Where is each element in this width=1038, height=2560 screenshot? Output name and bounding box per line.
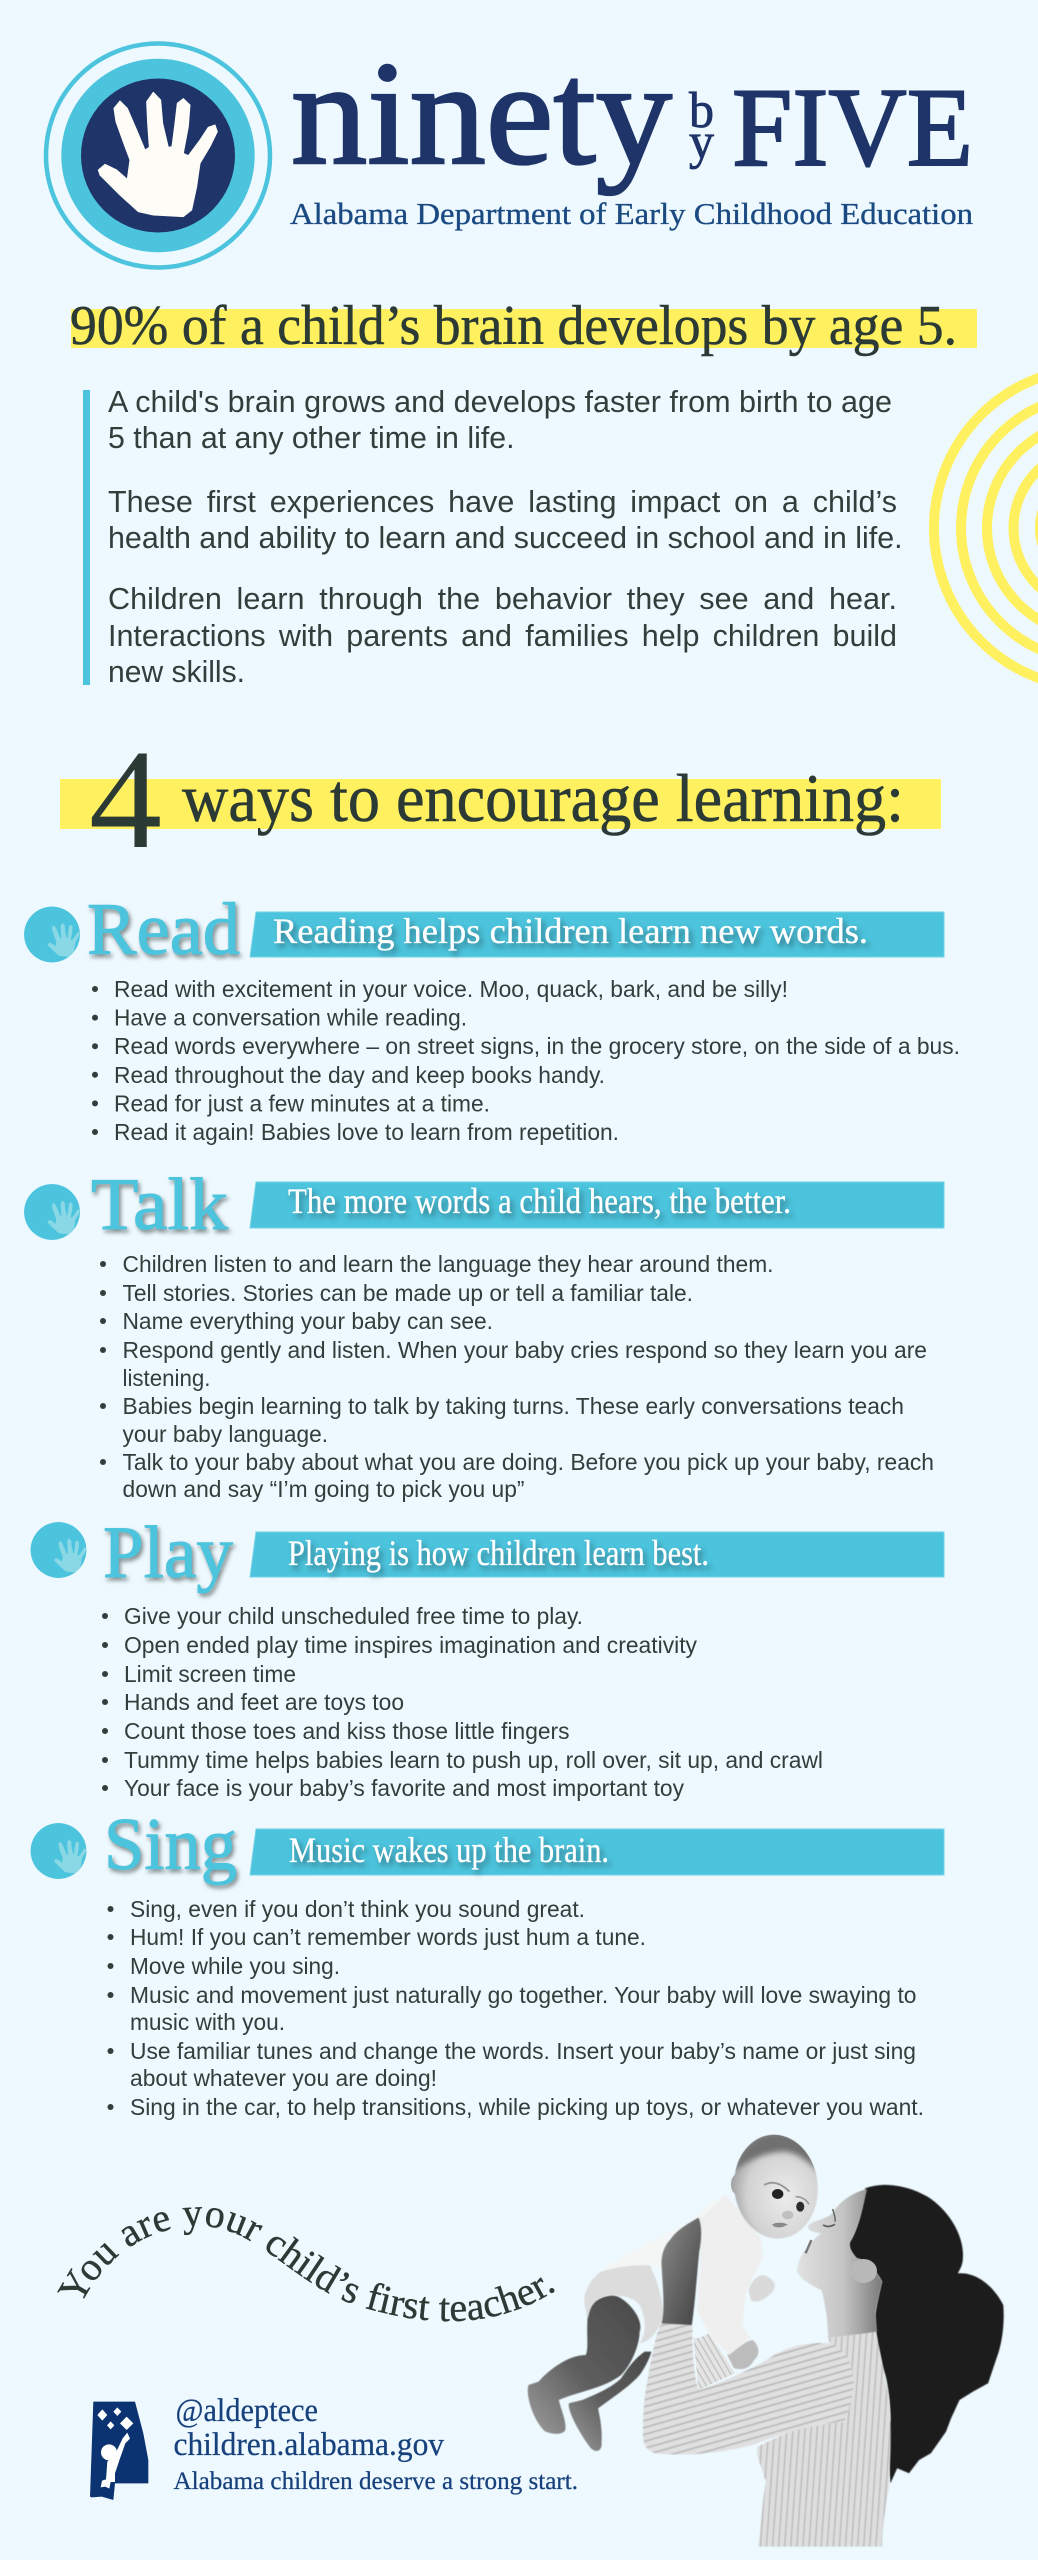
- wordmark: by: y: [689, 114, 714, 170]
- wordmark: by: [689, 83, 714, 170]
- baby's hand right: [748, 2275, 775, 2302]
- text block: intro paragraphs with blue rule: Children learn through the behavior they see and hear.: [108, 582, 897, 616]
- icon: yellow concentric rings: [934, 368, 1038, 688]
- heading: 4 ways to encourage learning: [60, 720, 941, 878]
- text block: intro paragraphs with blue rule: These first experiences have lasting impact on a child’s: [108, 485, 897, 519]
- list: play tips: Hands and feet are toys too: [124, 1689, 404, 1715]
- icon: read hand circle: [24, 906, 80, 962]
- list: sing tips: [108, 1896, 924, 2120]
- list: play tips: Limit screen time: [124, 1661, 296, 1687]
- icon: Alabama state with child reaching for stars: [90, 2402, 148, 2500]
- list: read tips: Read with excitement in your voice. Moo, quack, bark, and be silly!: [114, 976, 788, 1002]
- baby's bodysuit arm: [697, 2194, 763, 2355]
- list: talk tips: listening.: [122, 1365, 210, 1391]
- baby's diaper: [584, 2265, 663, 2343]
- text block: intro paragraphs with blue rule: A child's brain grows and develops faster from birth to age: [108, 385, 892, 419]
- list: sing tips: Move while you sing.: [130, 1953, 340, 1979]
- baby's hand lower: [727, 2340, 758, 2369]
- icon: sing hand circle: [30, 1823, 86, 1879]
- list: read tips: [92, 976, 960, 1145]
- baby's hair: [736, 2134, 816, 2174]
- list: play tips: Open ended play time inspires imagination and creativity: [124, 1632, 697, 1658]
- list: sing tips: Hum! If you can’t remember words just hum a tune.: [130, 1924, 646, 1950]
- mother's face and neck: [797, 2189, 882, 2338]
- baby's head: [729, 2131, 823, 2243]
- headline: 90% statement on yellow bar: 90% of a child’s brain develops by age 5.: [70, 295, 957, 357]
- list: play tips: Count those toes and kiss those little fingers: [124, 1718, 570, 1744]
- list: talk tips: Name everything your baby can see.: [122, 1308, 493, 1334]
- list: play tips: Your face is your baby’s favorite and most important toy: [124, 1775, 684, 1801]
- list: sing tips: music with you.: [130, 2009, 285, 2035]
- mother's ear: [850, 2259, 877, 2283]
- panel: Talk: [24, 1164, 944, 1502]
- list: play tips: [102, 1603, 823, 1801]
- list: sing tips: Use familiar tunes and change the words. Insert your baby’s name or just sing: [130, 2038, 916, 2064]
- heading: Sing: Sing: [104, 1804, 237, 1886]
- wordmark: FIVE: FIVE: [732, 66, 973, 190]
- list: talk tips: Respond gently and listen. When your baby cries respond so they learn you are: [122, 1337, 927, 1363]
- text: social handle: @aldeptece: [176, 2393, 318, 2429]
- list: read tips: Read throughout the day and keep books handy.: [114, 1062, 605, 1088]
- icon: talk hand circle: [24, 1184, 80, 1240]
- text block: intro paragraphs with blue rule: 5 than at any other time in life.: [108, 421, 515, 455]
- list: talk tips: down and say “I’m going to pick you up”: [122, 1476, 524, 1502]
- banner: talk: The more words a child hears, the better.: [288, 1181, 791, 1221]
- heading: 4 ways to encourage learning: 4: [89, 720, 162, 878]
- list: talk tips: [100, 1251, 934, 1502]
- mother's hair: [849, 2185, 1004, 2483]
- list: talk tips: Talk to your baby about what you are doing. Before you pick up your baby, reach: [122, 1449, 934, 1475]
- illustration: mother lifting baby: [528, 2131, 1004, 2547]
- banner: sing: [250, 1829, 944, 1875]
- text: website: children.alabama.gov: [174, 2427, 444, 2463]
- heading: Play: Play: [103, 1512, 233, 1594]
- text block: intro paragraphs with blue rule: [83, 385, 903, 689]
- list: talk tips: Babies begin learning to talk by taking turns. These early conversations teach: [122, 1393, 904, 1419]
- baby's bodysuit back: [599, 2194, 725, 2272]
- baby's near leg: [528, 2295, 640, 2434]
- heading: Read: Read: [87, 889, 240, 971]
- mother's far forearm: [694, 2333, 735, 2390]
- panel: Read: [24, 889, 960, 1145]
- list: talk tips: Tell stories. Stories can be made up or tell a familiar tale.: [122, 1280, 693, 1306]
- banner: play: Playing is how children learn best.: [288, 1533, 709, 1573]
- panel: Sing: [30, 1804, 944, 2120]
- text block: intro paragraphs with blue rule: health and ability to learn and succeed in school and in life.: [108, 521, 903, 555]
- list: read tips: Read words everywhere – on street signs, in the grocery store, on the side of a bus.: [114, 1033, 960, 1059]
- list: read tips: Read for just a few minutes at a time.: [114, 1090, 490, 1116]
- text block: intro paragraphs with blue rule: Interactions with parents and families help children build: [108, 619, 897, 653]
- mother's hand: [661, 2218, 701, 2325]
- banner: reading: Reading helps children learn new words.: [273, 911, 868, 951]
- mother's facial features: [806, 2209, 835, 2253]
- list: sing tips: Sing in the car, to help transitions, while picking up toys, or whatever you want.: [130, 2094, 924, 2120]
- curved tagline: You are your child’s first teacher.: [57, 2207, 554, 2322]
- heading: 4 ways to encourage learning: ways to encourage learning:: [182, 760, 904, 836]
- list: talk tips: your baby language.: [122, 1421, 328, 1447]
- text: slogan: Alabama children deserve a strong start.: [174, 2468, 578, 2495]
- wordmark: ninety: ninety: [291, 32, 672, 196]
- list: play tips: Give your child unscheduled free time to play.: [124, 1603, 583, 1629]
- subtitle: department name: Alabama Department of Early Childhood Education: [290, 196, 974, 231]
- list: read tips: Have a conversation while reading.: [114, 1005, 467, 1031]
- footer: Alabama logo and contact: [90, 2393, 578, 2500]
- list: play tips: Tummy time helps babies learn to push up, roll over, sit up, and crawl: [124, 1747, 823, 1773]
- mother's torso: [757, 2330, 891, 2547]
- text block: intro paragraphs with blue rule: new skills.: [108, 655, 245, 689]
- baby's ear: [731, 2174, 746, 2195]
- banner: sing: Music wakes up the brain.: [289, 1830, 609, 1870]
- icon: hand in concentric circles: [46, 44, 270, 268]
- panel: Play: [30, 1512, 944, 1801]
- baby's far leg: [569, 2352, 651, 2451]
- wordmark: by: b: [689, 83, 714, 139]
- list: sing tips: Sing, even if you don’t think you sound great.: [130, 1896, 585, 1922]
- list: talk tips: Children listen to and learn the language they hear around them.: [122, 1251, 774, 1277]
- icon: play hand circle: [30, 1522, 86, 1578]
- list: sing tips: about whatever you are doing!: [130, 2065, 437, 2091]
- logo: ninety by FIVE header: [46, 32, 974, 268]
- mother's sleeve: [643, 2321, 853, 2455]
- list: read tips: Read it again! Babies love to learn from repetition.: [114, 1119, 619, 1145]
- baby's face: [764, 2183, 809, 2227]
- banner: play: [250, 1532, 944, 1577]
- list: sing tips: Music and movement just naturally go together. Your baby will love swaying to: [130, 1982, 916, 2008]
- heading: Talk: Talk: [91, 1164, 228, 1246]
